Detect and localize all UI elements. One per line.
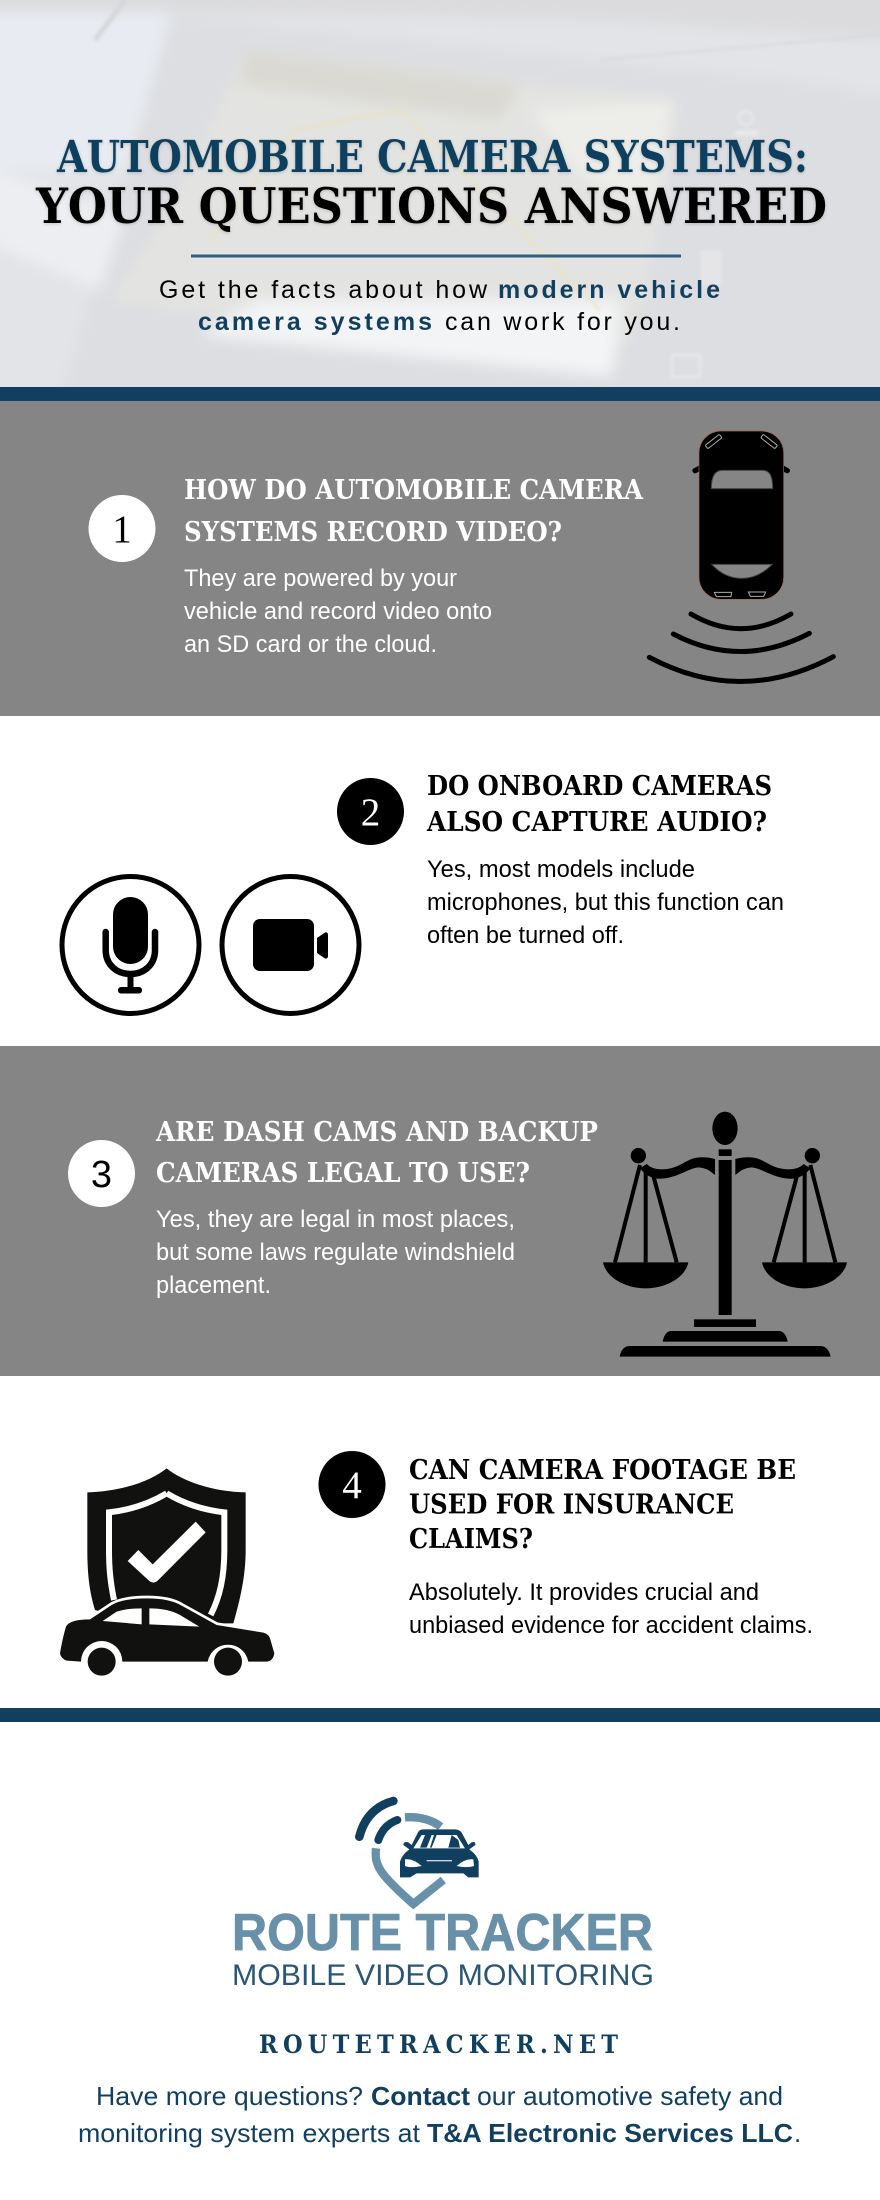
heading 4: CLAIMS? [409, 1524, 533, 1555]
panel: question 4 [0, 1376, 880, 1708]
body text 2: often be turned off. [427, 922, 624, 949]
subtitle: modern vehicle [498, 276, 720, 304]
heading 2: ALSO CAPTURE AUDIO? [426, 807, 767, 838]
icon: scales of justice [603, 1112, 847, 1357]
panel: question 1 [0, 401, 880, 716]
subtitle: can work for you. [445, 308, 680, 336]
website url: ROUTETRACKER.NET [259, 2030, 618, 2059]
heading 3: ARE DASH CAMS AND BACKUP [155, 1117, 598, 1148]
body text 2 [427, 856, 784, 949]
logo icon: location pin, signal and car [359, 1801, 479, 1904]
contact text: monitoring system experts at [78, 2118, 421, 2148]
body text 1: They are powered by your [184, 565, 457, 592]
contact text: Contact [371, 2081, 470, 2111]
body text 3 [156, 1206, 515, 1299]
logo tagline: MOBILE VIDEO MONITORING [232, 1959, 654, 1992]
panel background white [0, 1376, 880, 1708]
icon: shield with check and car [60, 1468, 274, 1676]
footer background [0, 1722, 880, 2200]
subtitle [159, 276, 720, 336]
logo wordmark: ROUTE TRACKER [232, 1904, 653, 1962]
contact text: T&A Electronic Services LLC [427, 2118, 793, 2148]
contact text: our automotive safety and [477, 2081, 783, 2111]
number badge 2 [337, 778, 404, 845]
subtitle: Get the facts about how [159, 276, 488, 304]
icon: microphone in circle [62, 876, 199, 1014]
panel: question 3 [0, 1046, 880, 1376]
body text 4: Absolutely. It provides crucial and [409, 1579, 759, 1606]
navy divider bar top [0, 387, 880, 401]
number badge 4: 4 [342, 1464, 362, 1507]
heading 4: USED FOR INSURANCE [409, 1490, 734, 1520]
heading 4: CAN CAMERA FOOTAGE BE [409, 1455, 796, 1486]
heading 2: DO ONBOARD CAMERAS [427, 771, 772, 802]
heading 1 [184, 475, 644, 548]
panel: question 2 [0, 716, 880, 1046]
hero background: blurred backup camera screen photo [0, 0, 880, 400]
body text 1: an SD card or the cloud. [184, 631, 437, 658]
subtitle: camera systems [198, 308, 432, 336]
body text 2: Yes, most models include [427, 856, 695, 883]
body text 3: placement. [156, 1272, 271, 1299]
body text 1 [184, 565, 492, 658]
heading 3 [155, 1117, 598, 1189]
contact text [78, 2081, 801, 2148]
icon: video camera in circle [222, 876, 359, 1014]
contact text: Have more questions? [96, 2081, 363, 2111]
number badge 2: 2 [361, 791, 380, 834]
number badge 4 [318, 1451, 386, 1518]
body text 4 [409, 1579, 813, 1639]
heading 4 [409, 1455, 796, 1555]
heading 1: HOW DO AUTOMOBILE CAMERA [184, 475, 644, 506]
panel background gray [0, 1046, 880, 1376]
contact text: . [794, 2118, 801, 2148]
number badge 1: 1 [112, 508, 132, 551]
body text 3: but some laws regulate windshield [156, 1239, 515, 1266]
body text 2: microphones, but this function can [427, 889, 784, 916]
body text 1: vehicle and record video onto [184, 598, 492, 625]
title divider [191, 254, 681, 258]
title line 2: YOUR QUESTIONS ANSWERED [35, 177, 827, 235]
title line 1: AUTOMOBILE CAMERA SYSTEMS: [56, 132, 808, 183]
navy divider bar bottom [0, 1708, 880, 1722]
logo: Route Tracker [232, 1801, 654, 1992]
body text 4: unbiased evidence for accident claims. [409, 1612, 813, 1639]
number badge 1 [88, 495, 156, 562]
heading 2 [426, 771, 772, 838]
panel background gray [0, 401, 880, 716]
number badge 3 [68, 1140, 135, 1207]
heading 3: CAMERAS LEGAL TO USE? [156, 1158, 530, 1189]
body text 3: Yes, they are legal in most places, [156, 1206, 515, 1233]
number badge 3: 3 [91, 1154, 112, 1196]
panel: footer [0, 1722, 880, 2200]
panel: hero header [0, 0, 880, 400]
heading 1: SYSTEMS RECORD VIDEO? [184, 517, 562, 548]
panel background white [0, 716, 880, 1046]
icon: car top view with sensor waves [649, 431, 833, 681]
